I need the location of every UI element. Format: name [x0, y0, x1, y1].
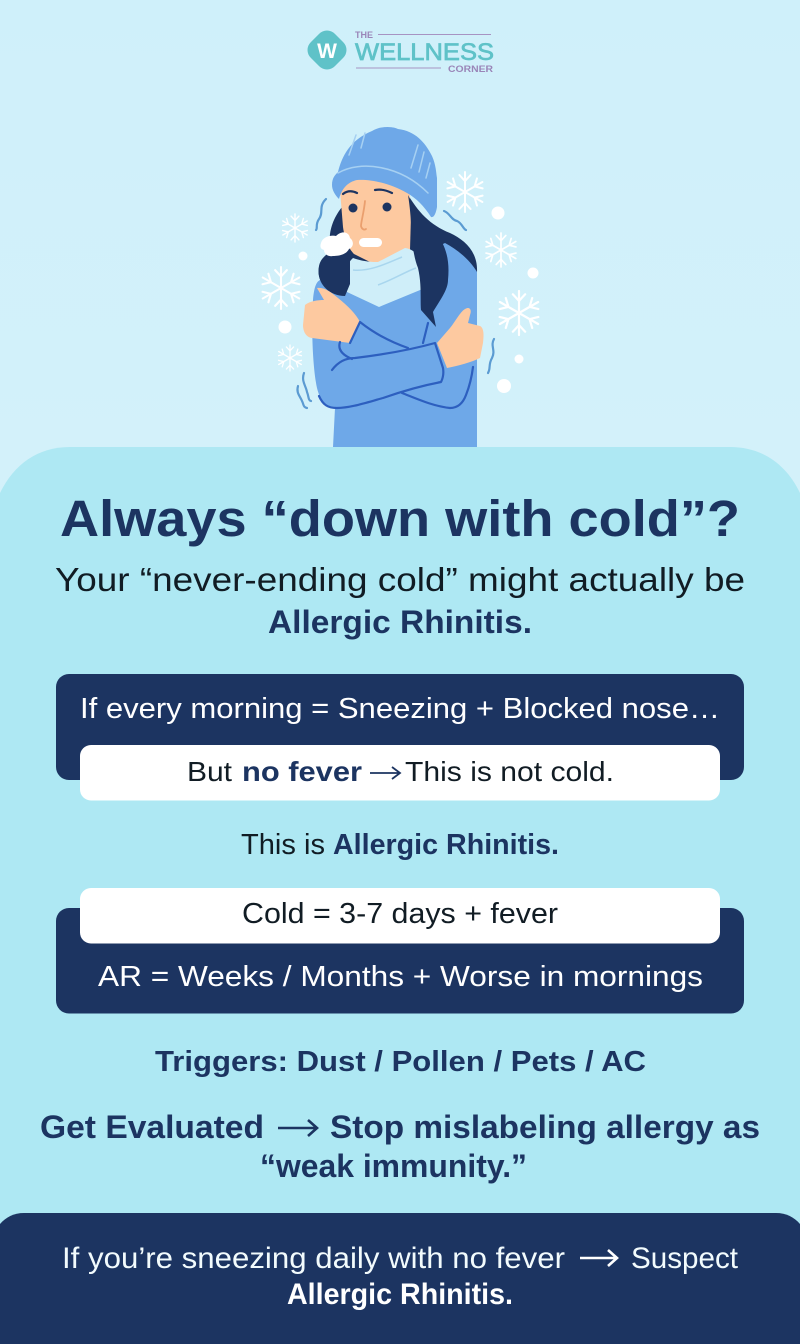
- no fever callout: This is not cold.: [405, 756, 614, 787]
- right hand: [437, 308, 484, 368]
- no fever callout: [80, 745, 720, 800]
- main panel: [0, 447, 800, 1344]
- get evaluated message: [40, 1109, 760, 1184]
- title: Always “down with cold”?: [60, 490, 740, 547]
- logo wordmark: CORNER: [448, 64, 493, 75]
- hair front lock: [408, 195, 448, 327]
- card: cold vs AR: AR = Weeks / Months + Worse in mornings: [98, 961, 703, 993]
- logo wordmark: THE: [355, 30, 373, 40]
- logo mark: [303, 26, 351, 74]
- hat: [332, 127, 437, 217]
- no fever callout: no fever: [242, 756, 362, 787]
- card: cold vs AR: Cold = 3-7 days + fever: [242, 898, 558, 930]
- cold breath: [320, 232, 353, 256]
- logo mark: W: [317, 40, 337, 63]
- subtitle: Your “never-ending cold” might actually be: [55, 561, 745, 598]
- logo wordmark: WELLNESS: [355, 39, 494, 66]
- get evaluated message: Stop mislabeling allergy as: [330, 1109, 760, 1145]
- footer band: [0, 1213, 800, 1344]
- card: cold vs AR: [56, 888, 744, 1014]
- no fever callout: But: [187, 756, 232, 787]
- logo wordmark: [355, 30, 494, 75]
- snowflakes and snow dots: [263, 172, 538, 393]
- scarf: [345, 248, 425, 307]
- woman shivering in winter clothes: [303, 127, 484, 447]
- card: morning symptoms: [56, 674, 744, 800]
- get evaluated message: Get Evaluated: [40, 1109, 264, 1145]
- statement: allergic rhinitis: Allergic Rhinitis.: [333, 829, 559, 861]
- sleeve outlines: [319, 322, 473, 408]
- statement: allergic rhinitis: This is: [241, 829, 325, 861]
- hair back: [319, 193, 477, 296]
- card: morning symptoms: If every morning = Sneezing + Blocked nose…: [80, 693, 720, 725]
- logo: [303, 26, 494, 75]
- footer band: If you’re sneezing daily with no fever: [62, 1242, 565, 1275]
- get evaluated message: “weak immunity.”: [260, 1148, 527, 1184]
- shiver marks: [297, 199, 494, 408]
- subtitle: Allergic Rhinitis.: [268, 604, 532, 640]
- subtitle: [55, 561, 745, 640]
- face features: [343, 190, 392, 247]
- sweater: [312, 243, 477, 447]
- triggers: Triggers: Dust / Pollen / Pets / AC: [155, 1046, 646, 1078]
- face and neck: [339, 178, 411, 266]
- footer band: Allergic Rhinitis.: [287, 1278, 513, 1311]
- left hand: [303, 288, 360, 343]
- footer band: Suspect: [631, 1242, 739, 1275]
